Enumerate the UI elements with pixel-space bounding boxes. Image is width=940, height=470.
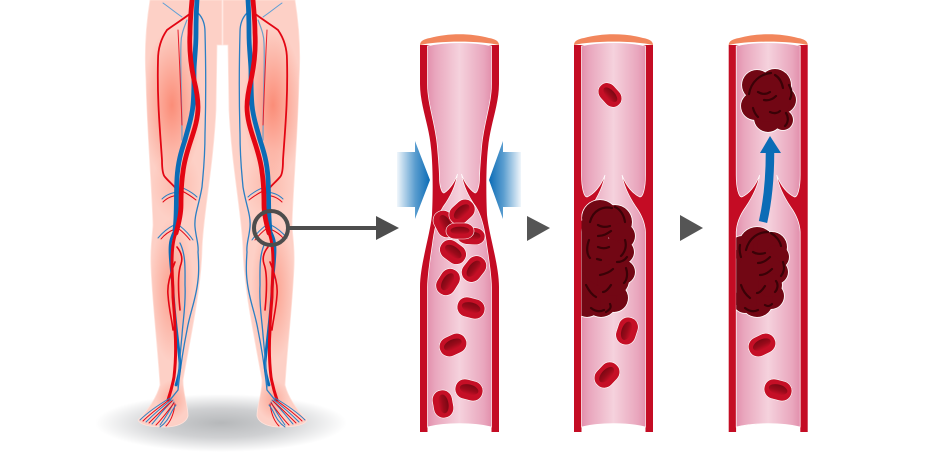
step arrow 1	[527, 216, 550, 241]
lower clot	[730, 227, 789, 317]
left leg	[138, 0, 222, 427]
right leg	[223, 0, 307, 427]
detached clot	[741, 69, 796, 132]
red blood cells	[430, 195, 490, 420]
blood clot	[582, 199, 636, 318]
step arrow 2	[680, 215, 703, 241]
upward blue arrow	[760, 136, 781, 222]
compression arrow right	[489, 141, 521, 219]
vein cap	[574, 34, 653, 45]
vessel 1: compressed vein	[397, 34, 521, 432]
legs with blood vessels	[138, 0, 307, 427]
compression arrow left	[397, 141, 430, 219]
magnifier circle and pointer arrow	[254, 211, 399, 245]
vessel 3: clot travelling	[729, 34, 808, 432]
red blood cells	[745, 330, 794, 403]
vein cap	[729, 34, 808, 45]
vessel 2: clot formed	[573, 34, 653, 432]
floor shadow	[95, 394, 347, 452]
vein cap	[420, 34, 499, 45]
red blood cells	[590, 79, 641, 392]
